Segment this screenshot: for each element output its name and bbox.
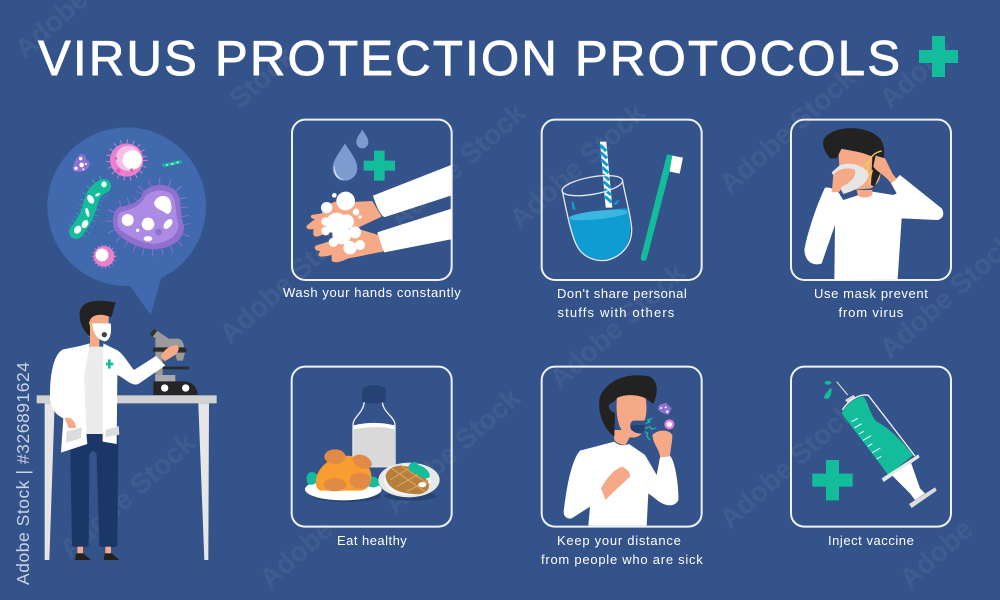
speech bubble with germs <box>47 127 206 315</box>
chicken plate <box>305 449 382 502</box>
watermark tiles: Adobe Stock <box>543 257 692 394</box>
glass <box>561 172 632 261</box>
caption: personal items <box>557 286 687 320</box>
shoes <box>75 547 119 560</box>
bottle <box>353 385 395 467</box>
steak plate <box>378 462 440 501</box>
hair <box>599 375 657 437</box>
lab coat <box>50 343 165 453</box>
watermark tiles: Adobe Stock <box>383 97 532 234</box>
watermark tiles: Adobe <box>253 513 339 594</box>
icon: title plus <box>919 36 958 77</box>
soap foam <box>321 192 365 254</box>
trousers <box>70 433 118 547</box>
scientist at microscope <box>37 301 217 560</box>
bubble shape <box>47 127 206 315</box>
watermark tiles: Adobe Stock <box>713 397 862 534</box>
shirt <box>84 347 105 434</box>
panel frame <box>292 120 452 280</box>
neck and face <box>613 394 647 445</box>
panel: eat healthy <box>292 367 452 527</box>
germ: pink virus <box>109 143 144 177</box>
splash <box>572 200 620 210</box>
neck and head <box>80 301 116 348</box>
drops <box>824 381 832 399</box>
hands <box>306 201 383 262</box>
watermark tiles: Adobe <box>873 33 959 114</box>
watermark tiles: Adobe <box>893 513 979 594</box>
cough fist <box>652 431 672 457</box>
watermark tiles: Stock <box>223 40 301 114</box>
hand on mask <box>832 168 855 192</box>
panel: wash hands <box>292 120 453 280</box>
icon: plus <box>364 151 395 181</box>
watermark tiles: Adobe Stock <box>378 382 527 519</box>
icon: water drops <box>333 130 368 181</box>
watermark tiles: Adobe Stock <box>213 212 362 349</box>
water highlight <box>569 208 628 222</box>
panel: keep distance <box>542 367 702 527</box>
germ: large purple <box>113 185 184 249</box>
stock id side text: Adobe Stock | #326891624 <box>13 362 33 585</box>
body <box>804 175 943 280</box>
caption: wash hands: Wash your hands constantly <box>283 285 461 300</box>
caption: distance <box>541 533 703 567</box>
caption: personal items: Don't share personal <box>557 286 687 301</box>
body <box>564 442 678 526</box>
watermark tiles: Adobe Stock <box>53 427 202 564</box>
open mouth <box>631 425 645 433</box>
germ: small purple <box>72 154 90 172</box>
germ: small pink virus <box>93 246 115 267</box>
caption: distance: Keep your distance <box>557 533 681 548</box>
caption: mask <box>814 286 928 320</box>
straw <box>600 142 612 208</box>
panel: inject vaccine <box>791 367 951 527</box>
germ: small green <box>164 162 180 165</box>
panel: do not share <box>542 120 702 280</box>
icon: toothbrush <box>641 154 683 261</box>
hand at ear <box>873 156 897 183</box>
watermark tiles: Adobe Stock <box>503 97 652 234</box>
watermark tiles: Adobe Stock <box>713 62 862 199</box>
panel frame <box>791 367 951 527</box>
panel: use mask <box>791 120 951 280</box>
icon: plus <box>812 460 853 500</box>
germs from mouth <box>645 403 674 440</box>
panel frame <box>292 367 452 527</box>
panel frame <box>791 120 951 280</box>
hair and head <box>823 128 884 197</box>
caption: mask: from virus <box>838 305 904 320</box>
mask <box>832 151 882 194</box>
hand on chest <box>601 467 630 500</box>
caption: personal items: stuffs with others <box>558 305 675 320</box>
caption: vaccine: Inject vaccine <box>828 533 914 548</box>
water <box>569 208 630 260</box>
germ: green bacteria <box>72 181 107 235</box>
hand on microscope <box>161 345 179 361</box>
title: VIRUS PROTECTION PROTOCOLS <box>38 32 900 86</box>
syringe <box>837 382 937 508</box>
caption: mask: Use mask prevent <box>814 286 928 301</box>
sleeves <box>373 164 453 252</box>
table <box>37 395 217 560</box>
panel frame <box>542 120 702 280</box>
caption: distance: from people who are sick <box>541 552 703 567</box>
panel frame <box>542 367 702 527</box>
caption: healthy: Eat healthy <box>337 533 407 548</box>
microscope <box>149 329 198 395</box>
